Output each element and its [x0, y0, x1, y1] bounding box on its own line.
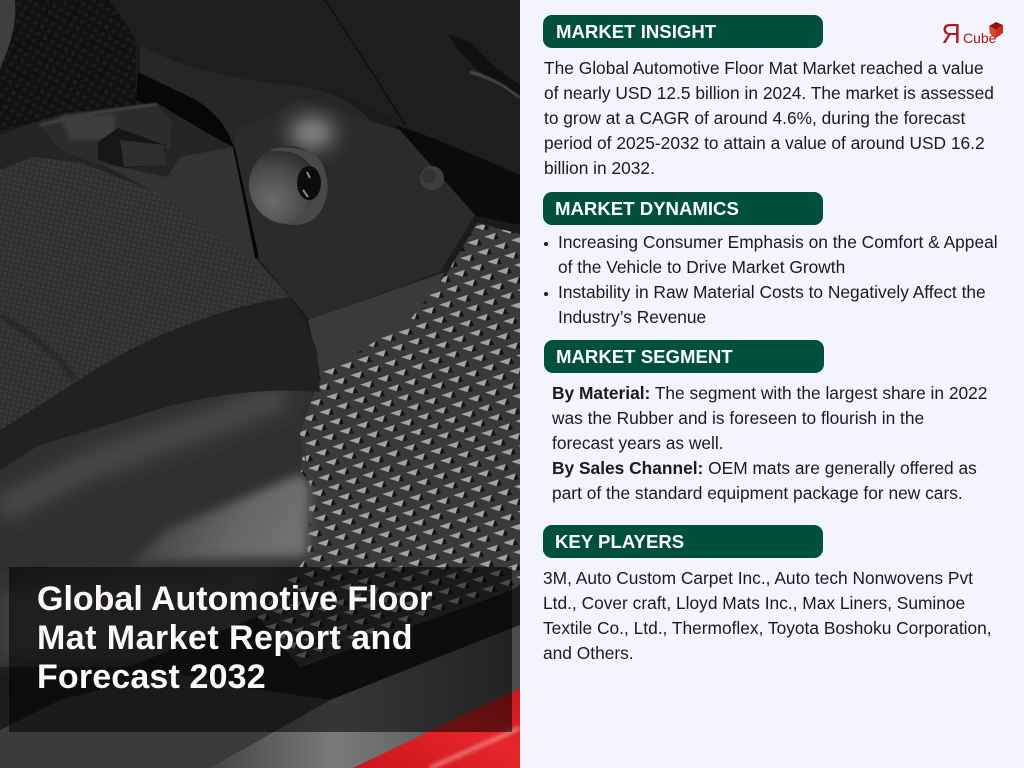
text: market insight: to grow at a CAGR of around 4.6%, during the forecast	[544, 108, 965, 128]
text: key players: 3M, Auto Custom Carpet Inc., Auto tech Nonwovens Pvt	[543, 568, 973, 588]
title overlay panel	[9, 567, 512, 732]
text: market segment	[552, 383, 987, 503]
heading: market dynamics	[543, 192, 823, 225]
list: market dynamics: Industry’s Revenue	[558, 307, 706, 327]
logo: RCube	[942, 18, 1003, 49]
heading: market segment: MARKET SEGMENT	[556, 346, 733, 367]
seat lower body	[0, 380, 320, 667]
text: key players: Ltd., Cover craft, Lloyd Mats Inc., Max Liners, Suminoe	[543, 593, 965, 613]
text: market insight: billion in 2032.	[544, 158, 655, 178]
heading: key players	[543, 525, 823, 558]
seat bolster	[0, 297, 320, 470]
heading: market insight: MARKET INSIGHT	[556, 21, 716, 42]
heading: key players: KEY PLAYERS	[555, 531, 684, 552]
text: market segment: By Sales Channel: OEM mats are generally offered as	[552, 458, 977, 478]
title: Forecast 2032	[37, 658, 266, 696]
list: market dynamics: Instability in Raw Material Costs to Negatively Affect the	[558, 282, 986, 302]
top-left mesh mat	[0, 0, 136, 130]
list: market dynamics	[544, 232, 998, 327]
ashtray recess	[249, 146, 327, 224]
cup holder	[0, 103, 290, 297]
list: market dynamics: Increasing Consumer Emphasis on the Comfort & Appeal	[558, 232, 998, 252]
text: market segment: By Material: The segment with the largest share in 2022	[552, 383, 987, 403]
logo: RCube: Cube	[963, 30, 996, 46]
heading: market segment	[544, 340, 824, 373]
seat fabric	[0, 157, 290, 430]
text: market segment: was the Rubber and is foreseen to flourish in the	[552, 408, 924, 428]
text: market insight	[544, 58, 994, 178]
text: market segment: forecast years as well.	[552, 433, 724, 453]
photo: car seat and floor mat	[0, 0, 520, 768]
text: key players: Textile Co., Ltd., Thermoflex, Toyota Boshoku Corporation,	[543, 618, 992, 638]
title	[37, 580, 432, 696]
list: market dynamics: of the Vehicle to Drive Market Growth	[558, 257, 845, 277]
heading: market insight	[543, 15, 823, 48]
heading: market dynamics: MARKET DYNAMICS	[555, 198, 739, 219]
text: key players	[543, 568, 992, 663]
text: market insight: period of 2025-2032 to attain a value of around USD 16.2	[544, 133, 985, 153]
title: Global Automotive Floor	[37, 580, 432, 618]
text: market segment: part of the standard equipment package for new cars.	[552, 483, 963, 503]
upper console	[110, 0, 520, 190]
text: market insight: The Global Automotive Floor Mat Market reached a value	[544, 58, 984, 78]
text: market insight: of nearly USD 12.5 billion in 2024. The market is assessed	[544, 83, 994, 103]
carpet	[308, 272, 445, 372]
title: Mat Market Report and	[37, 619, 413, 657]
text: key players: and Others.	[543, 643, 634, 663]
panel highlight	[290, 117, 334, 149]
logo: RCube: R	[942, 18, 961, 49]
floor mat	[257, 223, 520, 667]
kick panel	[234, 100, 475, 320]
dark gap	[136, 72, 258, 258]
lower sill and car body	[0, 590, 520, 768]
panel bolt	[420, 166, 444, 190]
console underside	[140, 45, 400, 170]
